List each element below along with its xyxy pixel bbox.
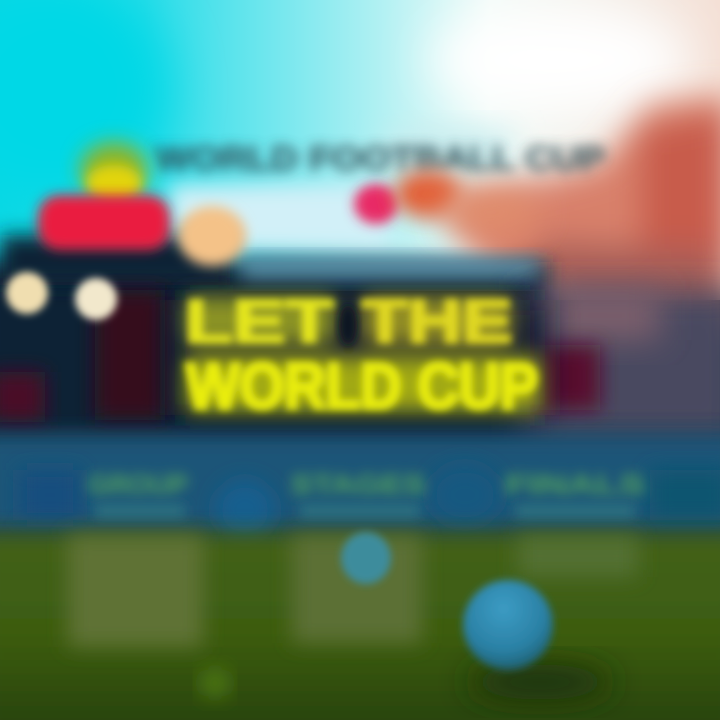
icon: large ball	[463, 580, 612, 700]
column headings: FINALS	[505, 469, 645, 500]
main heading: yellow title: WORLD CUP	[186, 350, 538, 422]
icon: small ball	[341, 532, 391, 584]
column headings: GROUP	[88, 469, 188, 500]
sky background	[0, 0, 720, 300]
main heading: yellow title: LET	[185, 288, 333, 355]
column headings	[88, 469, 645, 517]
main heading: yellow title	[185, 288, 540, 422]
icon: two glowing white dots	[6, 272, 117, 320]
main heading: yellow title: THE	[362, 288, 512, 355]
icon: red orange logo right	[354, 170, 540, 236]
text block: right column	[518, 535, 638, 577]
text block: centre column	[292, 535, 422, 643]
column headings: STAGES	[290, 469, 426, 500]
heading: small blurred title: WORLD FOOTBALL CUP	[155, 140, 605, 178]
panel: grass field	[0, 532, 720, 720]
icon: red and yellow logo left	[38, 142, 246, 266]
text block: left column	[68, 535, 203, 647]
panel: salmon stand at right	[450, 95, 720, 330]
icon: small glow on grass	[201, 669, 229, 697]
panel: blue band	[0, 435, 720, 540]
panel: dark stadium band	[0, 235, 720, 440]
